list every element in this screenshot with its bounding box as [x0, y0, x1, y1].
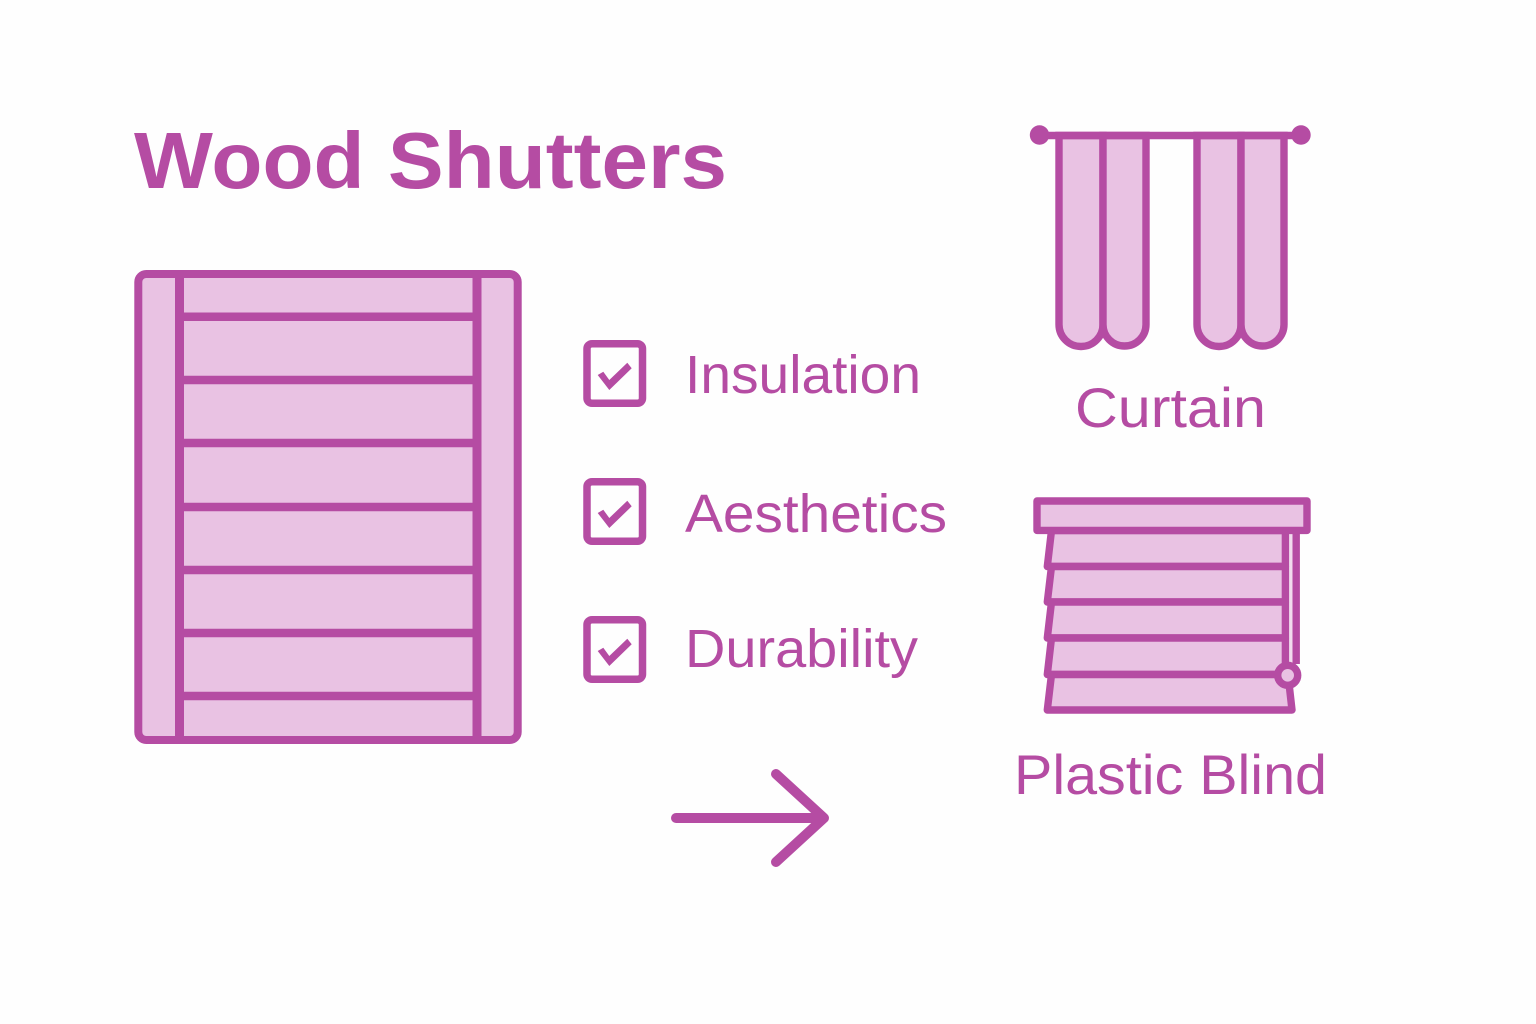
icon: wood shutter: [138, 274, 518, 740]
benefit: insulation: [587, 344, 921, 405]
benefit: durability: Durability: [685, 619, 918, 679]
title: Wood Shutters: [134, 116, 727, 205]
icon: plastic blind: [1037, 501, 1307, 710]
arrow: [676, 774, 824, 862]
benefit: aesthetics: [587, 482, 947, 544]
label: curtain: Curtain: [1075, 376, 1266, 439]
icon: curtain: [1030, 125, 1311, 346]
benefit: aesthetics: Aesthetics: [685, 484, 947, 544]
benefit: durability: [587, 619, 918, 679]
benefit: insulation: Insulation: [685, 345, 921, 405]
label: plastic blind: Plastic Blind: [1014, 743, 1327, 806]
